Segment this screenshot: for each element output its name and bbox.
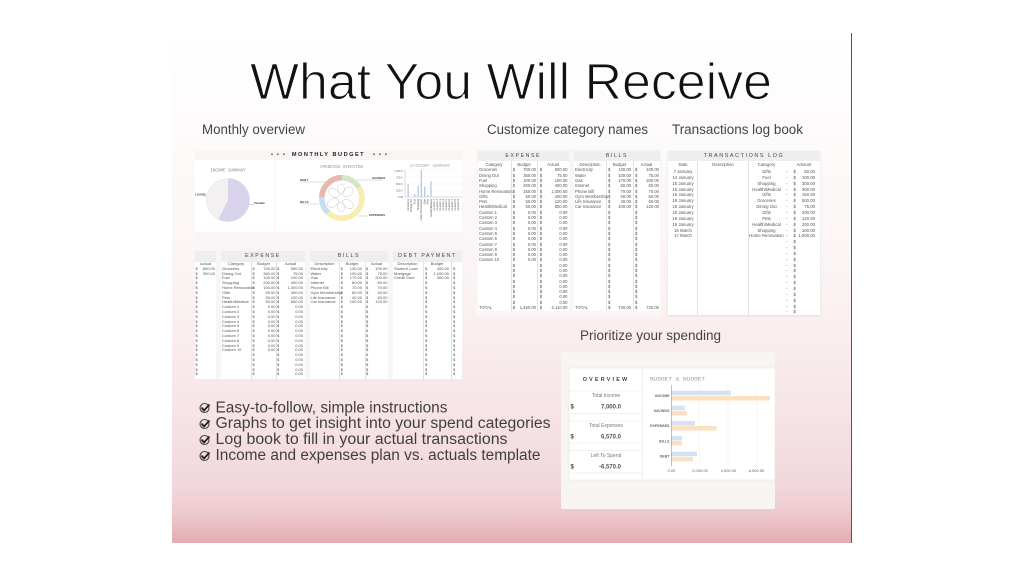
panel: monthly budget screenshot xyxy=(195,150,462,379)
panel: transactions log: Category xyxy=(758,162,775,167)
bar chart: budget vs actual: 6,000.00 xyxy=(749,468,765,473)
table: expense: Groceries Dining Out Fuel Shopping Home Renovation Gifts Pets Health/Medical Custom 1 Custom 2 Custom 3 Custom 4 Custom 5 Custom 6 Custom 7 Custom 8 Custom 9 Custom 10 xyxy=(222,266,254,352)
table: bills detail: $ $ $ $ $ $ $ $ $ $ $ $ $ $ $ $ $ $ $ $ $ $ $ $ $ $ $ xyxy=(635,167,637,310)
overview summary xyxy=(569,377,642,473)
bar chart: category summary: Dining Out xyxy=(409,199,413,212)
table: bills detail: Electricity Water Gas Internet Phone Bill Gym Membership Life Insurance Car Insurance TOTAL xyxy=(575,167,608,310)
pie chart: income summary: INCOME SUMMARY xyxy=(210,170,246,174)
bar chart: category summary: Gifts xyxy=(422,198,426,205)
panel: transactions log xyxy=(668,151,820,315)
table: bills detail: Budget xyxy=(613,162,626,167)
table: income, cropped: Actual xyxy=(200,261,211,266)
bar chart: category summary: Home Renovation xyxy=(419,198,423,221)
table: bills detail: 100.00 75.00 200.00 60.00 70.00 50.00 60.00 120.00 720.00 xyxy=(646,167,659,310)
heading: prioritize your spending: Prioritize your spending xyxy=(580,328,721,343)
table: bills: $ $ $ $ $ $ $ $ $ $ $ $ $ $ $ $ $ $ $ $ $ $ $ xyxy=(341,266,343,376)
table: debt payment: 400.00 1,100.00 300.00 xyxy=(433,266,449,280)
monthly budget heading: MONTHLY BUDGET xyxy=(292,152,365,158)
bar chart: category summary: 500.0 xyxy=(396,182,403,186)
table heading: debt payment xyxy=(393,251,462,262)
list item 4: Income and expenses plan vs. actuals template xyxy=(216,447,540,464)
donut chart: spending overview: SPENDING OVERVIEW xyxy=(320,166,363,170)
stat: left to spend xyxy=(570,453,622,470)
pie chart: income summary xyxy=(195,170,265,222)
bar chart: category summary: Custom 6 xyxy=(447,199,451,211)
bar chart: category summary: Custom 1 xyxy=(432,199,436,211)
donut chart: spending overview: EXPENSES xyxy=(369,213,385,217)
table heading: bills: BILLS xyxy=(338,253,360,259)
bar chart: budget vs actual: DEBT xyxy=(660,454,670,458)
stat: total expenses: 6,570.0 xyxy=(601,434,622,440)
table: expense detail: Budget xyxy=(517,162,531,167)
bar chart: category summary: CATEGORY SUMMARY xyxy=(410,165,451,169)
bar chart: category summary: 750.0 xyxy=(396,176,403,180)
bar chart: budget vs actual: 0.00 xyxy=(668,468,676,473)
table: expense: Category xyxy=(228,261,244,266)
stat: total income: $ xyxy=(570,404,574,410)
checklist xyxy=(200,400,551,464)
table heading: expense: EXPENSE xyxy=(245,253,281,259)
heading: customize category names: Customize category names xyxy=(487,122,648,137)
stat: total income: 7,000.0 xyxy=(601,404,622,410)
bar chart: category summary: Custom 4 xyxy=(441,199,445,211)
table heading: expense xyxy=(221,251,305,262)
bar chart: category summary: 1,000.0 xyxy=(394,169,403,173)
bar chart: budget vs actual: INCOME xyxy=(655,394,670,398)
donut chart: spending overview: BILLS xyxy=(300,200,309,204)
stat: total expenses: Total Expenses xyxy=(589,423,623,429)
bar chart: budget vs actual: EXPENSES xyxy=(650,424,670,428)
bar chart: category summary: Health/Medical xyxy=(429,199,433,217)
heading: monthly overview: Monthly overview xyxy=(202,122,305,137)
table heading: bills xyxy=(310,251,388,262)
bar chart: budget vs actual: BILLS xyxy=(659,440,670,444)
stat: total income xyxy=(570,393,622,410)
monthly budget charts xyxy=(195,152,462,232)
table: bills detail: $ $ $ $ $ $ $ $ $ $ $ $ $ $ $ $ $ $ $ $ $ $ $ $ $ $ $ xyxy=(608,167,610,310)
table: expense: 500.00 75.00 100.00 400.00 1,000.00 400.00 120.00 600.00 0.00 0.00 0.00 0.00 0.00 0.00 0.00 0.00 0.00 0.00 0.00 0.00 0.00 0.00 0.00 xyxy=(287,266,303,376)
stat: left to spend: -6,570.0 xyxy=(599,464,622,470)
table: debt payment: Budget xyxy=(431,261,443,266)
bar chart: category summary: Custom 2 xyxy=(435,199,439,211)
table: bills: 100.00 75.00 200.00 60.00 70.00 50.00 60.00 120.00 xyxy=(375,266,388,304)
table: expense detail: 700.00 360.00 100.00 200.00 150.00 50.00 50.00 50.00 0.00 0.00 0.00 0.00 0.00 0.00 0.00 0.00 0.00 0.00 1,460.00 xyxy=(520,167,536,310)
table: bills: $ $ $ $ $ $ $ $ $ $ $ $ $ $ $ $ $ $ $ $ $ $ $ xyxy=(366,266,368,376)
title: What You Will Receive xyxy=(250,53,772,110)
table heading: bills detail: BILLS xyxy=(606,153,628,159)
table: debt payment xyxy=(393,251,462,379)
table: debt payment: Student Loan Mortgage Credit Card xyxy=(394,266,418,280)
table: expense detail: $ $ $ $ $ $ $ $ $ $ $ $ $ $ $ $ $ $ $ $ $ $ $ $ $ $ $ xyxy=(540,167,542,310)
table heading: bills detail xyxy=(574,151,660,161)
bar chart: category summary: Custom 9 xyxy=(456,199,460,211)
table: expense detail: $ $ $ $ $ $ $ $ $ $ $ $ $ $ $ $ $ $ $ $ $ $ $ $ $ $ $ xyxy=(513,167,515,310)
table: expense xyxy=(221,251,305,379)
slide background xyxy=(172,33,852,543)
transaction categories: Gifts Fuel Shopping Health/Medical Gifts Groceries Dining Out Gifts Pets Health/Medical Shopping Home Renovation xyxy=(749,169,784,238)
donut chart: spending overview xyxy=(300,166,385,218)
table: expense: Budget xyxy=(257,261,270,266)
bar chart: category summary: 0.00 xyxy=(398,195,404,199)
table heading: transactions log xyxy=(668,151,820,161)
table: debt payment: $ $ $ $ $ $ $ $ $ $ $ $ $ $ $ $ $ $ $ $ $ $ $ xyxy=(453,266,455,376)
table: expense: $ $ $ $ $ $ $ $ $ $ $ $ $ $ $ $ $ $ $ $ $ $ $ xyxy=(277,266,279,376)
table: expense detail: Groceries Dining Out Fuel Shopping Home Renovation Gifts Pets Health/Medical Custom 1 Custom 2 Custom 3 Custom 4 Custom 5 Custom 6 Custom 7 Custom 8 Custom 9 Custom 10 TOTAL xyxy=(479,167,513,310)
bar chart: category summary: 250.0 xyxy=(396,188,403,192)
table: expense detail: 500.00 75.00 100.00 400.00 1,000.00 400.00 120.00 600.00 0.00 0.00 0.00 0.00 0.00 0.00 0.00 0.00 0.00 0.00 0.00 0.00 0.00 0.00 0.00 0.00 0.00 0.00 2,110.00 xyxy=(551,167,568,310)
table: bills detail xyxy=(574,151,660,311)
table: expense detail: Actual xyxy=(547,162,559,167)
panel: transactions log: Amount xyxy=(797,162,811,167)
table heading: expense detail xyxy=(478,151,568,161)
chart title: BUDGET & BUDGET xyxy=(650,376,705,382)
table: expense: 700.00 360.00 100.00 200.00 150.00 50.00 50.00 50.00 0.00 0.00 0.00 0.00 0.00 0.00 0.00 0.00 0.00 0.00 xyxy=(263,266,276,352)
table: expense detail: Category xyxy=(486,162,502,167)
bar chart: category summary: Shopping xyxy=(416,198,420,210)
table: bills detail: Actual xyxy=(641,162,652,167)
stat: left to spend: $ xyxy=(570,464,574,470)
donut chart: spending overview: DEBT xyxy=(300,178,308,182)
list item 2: Graphs to get insight into your spend categories xyxy=(216,415,551,432)
panel: overview and budget chart xyxy=(561,352,775,509)
pie chart: income summary: LOANS xyxy=(195,192,206,196)
panel: transactions log: Description xyxy=(712,162,734,167)
list item 3: Log book to fill in your actual transactions xyxy=(216,431,508,448)
panel: customize category tables xyxy=(476,149,662,316)
bar chart: category summary: Custom 7 xyxy=(450,199,454,211)
table: debt payment: $ $ $ $ $ $ $ $ $ $ $ $ $ $ $ $ $ $ $ $ $ $ $ xyxy=(425,266,427,376)
panel: transactions log: - - - - - - - - - - - - - - - - - - - - - - - - - xyxy=(786,169,787,314)
list item 1: Easy-to-follow, simple instructions xyxy=(216,400,448,416)
table: debt payment: Description xyxy=(397,261,418,266)
panel: transactions log: $ $ $ $ $ $ $ $ $ $ $ $ $ $ $ $ $ $ $ $ $ $ $ $ $ xyxy=(794,169,796,314)
table: bills xyxy=(310,251,388,379)
bar chart: budget vs actual: 2,000.00 xyxy=(692,468,709,473)
bar chart: category summary: Custom 5 xyxy=(444,199,448,211)
heading dots left: • • • xyxy=(271,152,286,158)
table: income, cropped xyxy=(195,251,216,379)
donut chart: spending overview: SAVINGS xyxy=(372,176,385,180)
stat: total income: Total Income xyxy=(592,393,620,399)
table: expense detail xyxy=(478,151,568,311)
table: expense: Actual xyxy=(285,261,296,266)
heading dots right: • • • xyxy=(373,152,388,158)
panel: transactions log: Date xyxy=(678,162,688,167)
bar chart: category summary: Custom 8 xyxy=(453,199,457,211)
table: bills: Description xyxy=(314,261,334,266)
table: income, cropped: 800.00 300.00 xyxy=(203,266,215,276)
table: bills detail: Description xyxy=(580,162,600,167)
table: bills: Actual xyxy=(371,261,382,266)
heading: transactions log book: Transactions log book xyxy=(672,122,803,137)
bar chart: budget vs actual xyxy=(650,376,770,473)
table: bills: 130.00 100.00 170.00 60.00 70.00 60.00 40.00 100.00 xyxy=(350,266,362,304)
bar chart: category summary: Pets xyxy=(426,198,430,204)
table: bills detail: 130.00 100.00 170.00 60.00 70.00 60.00 40.00 100.00 740.00 xyxy=(618,167,631,310)
table heading: transactions log: TRANSACTIONS LOG xyxy=(704,153,784,159)
bar chart: category summary xyxy=(394,165,462,221)
bar chart: category summary: Groceries xyxy=(406,198,410,211)
table: bills: Budget xyxy=(346,261,358,266)
transaction dates: 7 January 14 January 15 January 15 January 15 January 18 January 19 January 19 January 19 January 19 January 15 March 17 March xyxy=(672,169,694,238)
stat: total expenses: $ xyxy=(570,434,574,440)
table heading: debt payment: DEBT PAYMENT xyxy=(398,253,457,259)
table: bills: Electricity Water Gas Internet Phone Bill Gym Membership Life Insurance Car Insurance xyxy=(310,266,342,304)
overview heading: OVERVIEW xyxy=(583,377,629,383)
transaction amounts: 50.00 100.00 300.00 300.00 150.00 500.00 75.00 200.00 120.00 200.00 100.00 1,000.00 xyxy=(798,169,815,238)
bar chart: category summary: Custom 3 xyxy=(438,199,442,211)
bar chart: budget vs actual: SAVINGS xyxy=(654,409,670,413)
stat: total expenses xyxy=(570,423,623,440)
slide right edge line xyxy=(851,33,852,543)
table: income, cropped: $ $ $ $ $ $ $ $ $ $ $ $ $ $ $ $ $ $ $ $ $ $ $ xyxy=(196,266,198,376)
pie chart: income summary: Taxable xyxy=(254,201,265,205)
stat: left to spend: Left To Spend xyxy=(591,453,622,459)
table: expense: $ $ $ $ $ $ $ $ $ $ $ $ $ $ $ $ $ $ $ $ $ $ $ xyxy=(252,266,255,376)
bar chart: budget vs actual: 4,000.00 xyxy=(721,468,737,473)
bar chart: category summary: Fuel xyxy=(412,199,416,204)
table heading: expense detail: EXPENSE xyxy=(505,153,541,159)
